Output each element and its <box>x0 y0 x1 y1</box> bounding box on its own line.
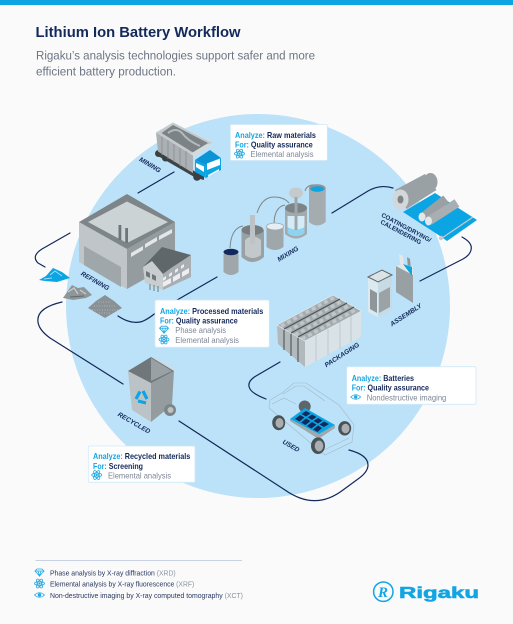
callout: recycled materials: For: Screening <box>93 461 143 471</box>
label: assembly: ASSEMBLY <box>388 302 424 329</box>
arrow: raw materials to refining <box>35 233 70 267</box>
label: used: USED <box>281 439 301 454</box>
legend: Phase analysis by X-ray diffraction (XRD) <box>50 568 176 578</box>
legend: Elemental analysis by X-ray fluorescence (XRF) <box>50 580 195 589</box>
icon: refining building <box>79 194 191 292</box>
arrow: recycled to raw materials <box>38 302 123 384</box>
logo: Rigaku: Rigaku <box>399 585 479 602</box>
label: refining: REFINING <box>79 271 110 292</box>
callout: raw materials <box>230 124 327 160</box>
icon: coating rollers <box>392 173 477 241</box>
arrow: used to recycled <box>179 421 368 501</box>
icon: elemental <box>159 334 169 345</box>
callout: batteries: Nondestructive imaging <box>367 392 447 402</box>
icon: phase <box>160 326 168 333</box>
icon: battery cell <box>368 270 392 317</box>
icon: elemental <box>234 148 244 159</box>
callout: processed materials: Elemental analysis <box>175 335 239 345</box>
subtitle: Rigaku’s analysis technologies support safer and more <box>36 48 315 62</box>
arrow: mixing to coating <box>332 187 393 213</box>
icon: blue material pile <box>39 268 70 282</box>
callout: recycled materials: Analyze: Recycled materials <box>93 451 191 461</box>
label: coating/drying/calendering: CALENDERING <box>379 219 423 246</box>
callout: batteries: Analyze: Batteries <box>352 373 414 383</box>
icon: imaging <box>34 593 44 597</box>
subtitle: efficient battery production. <box>36 64 176 78</box>
icon: battery packaging <box>277 295 362 367</box>
legend: Non-destructive imaging by X-ray computed tomography (XCT) <box>50 591 243 600</box>
callout: processed materials: For: Quality assurance <box>160 315 238 325</box>
icon: elemental <box>34 578 44 589</box>
background circle <box>66 114 450 498</box>
callout: batteries: For: Quality assurance <box>352 382 429 392</box>
callout: processed materials: Phase analysis <box>175 325 226 335</box>
icon: pouch cell <box>396 254 413 303</box>
icon: elemental <box>92 470 102 480</box>
icon: mixing tanks <box>224 184 326 275</box>
logo: Rigaku: R <box>377 585 388 601</box>
label: packaging: PACKAGING <box>324 342 361 369</box>
callout: batteries <box>347 367 476 404</box>
arrow: coating to assembly <box>420 237 471 281</box>
logo: Rigaku <box>374 582 479 602</box>
callout: recycled materials: Elemental analysis <box>108 470 171 480</box>
icon: phase <box>35 569 44 576</box>
legend <box>34 568 243 600</box>
label: mixing: MIXING <box>276 245 300 263</box>
arrow: packaging to used <box>249 362 280 399</box>
callout: raw materials: Elemental analysis <box>250 149 314 159</box>
label: coating/drying/calendering: COATING/DRYING/ <box>380 212 432 244</box>
arrow: refining to mining <box>138 172 174 193</box>
subtitle <box>36 48 315 78</box>
top bar <box>0 0 513 5</box>
callout: raw materials: Analyze: Raw materials <box>235 130 316 140</box>
arrow: processed materials to mixing <box>118 277 217 322</box>
label: mining: MINING <box>138 156 162 175</box>
icon: recycling bin <box>128 357 176 422</box>
icon: imaging <box>351 395 361 399</box>
icon: gray ore pile <box>63 285 92 300</box>
callout: raw materials: For: Quality assurance <box>235 139 313 149</box>
callout: recycled materials <box>88 446 195 482</box>
title: Lithium Ion Battery Workflow <box>36 24 241 41</box>
icon: electric car <box>269 383 354 455</box>
label: recycled: RECYCLED <box>116 411 151 436</box>
icon: truck <box>155 122 221 181</box>
callout: processed materials <box>155 300 269 347</box>
callout: processed materials: Analyze: Processed materials <box>160 306 264 316</box>
icon: gravel pile <box>88 295 122 318</box>
